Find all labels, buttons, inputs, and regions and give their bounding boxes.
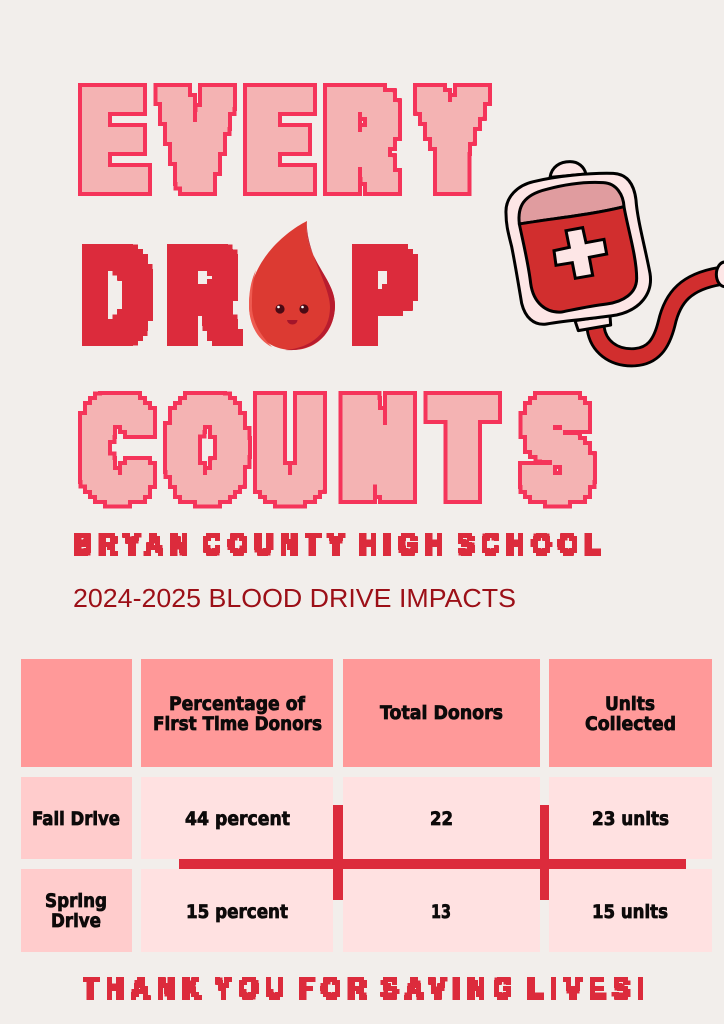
cell: spring units (549, 869, 712, 952)
row label: spring (21, 869, 132, 952)
row label: spring: Spring (45, 890, 107, 912)
icon: blood bag with tube (506, 162, 724, 357)
header cell: units: Units (605, 693, 655, 715)
cell: fall donors (343, 777, 540, 859)
title: COUNTS: COUNTS (85, 373, 587, 526)
table cross lines (179, 805, 686, 900)
cell: spring percent (141, 869, 333, 952)
cell: spring donors (343, 869, 540, 952)
footer: thank you: THANK YOU FOR SAVING LIVES! (83, 972, 645, 1004)
row label: fall (21, 777, 132, 859)
subtitle: impacts: 2024-2025 BLOOD DRIVE IMPACTS (73, 583, 516, 613)
cross (554, 228, 607, 278)
title: DROP: DR OP (83, 221, 414, 370)
cell: spring donors: 13 (431, 901, 451, 923)
header cell: total donors (343, 659, 540, 767)
header cell: percentage: First Time Donors (153, 713, 322, 735)
header cell: units (549, 659, 712, 767)
bag upper (519, 182, 624, 224)
bag body (506, 173, 651, 324)
cell: fall percent (141, 777, 333, 859)
subtitle: school: BRYAN COUNTY HIGH SCHOOL (74, 528, 600, 560)
header cell: total donors: Total Donors (380, 702, 503, 724)
tube connector (716, 262, 724, 287)
bag liquid (519, 207, 637, 312)
cell: fall units: 23 units (592, 808, 669, 830)
table (21, 659, 712, 952)
row label: fall: Fall Drive (32, 808, 120, 830)
neck (575, 316, 611, 331)
cell: spring percent: 15 percent (186, 901, 288, 923)
header cell: percentage: Percentage of (169, 693, 306, 715)
header cell: percentage (141, 659, 333, 767)
tube (596, 276, 720, 357)
cell: fall percent: 44 percent (185, 808, 290, 830)
icon: smiling blood drop (249, 221, 335, 350)
cell: spring units: 15 units (592, 901, 668, 923)
header cell: blank (21, 659, 132, 767)
cell: fall donors: 22 (430, 808, 453, 830)
row label: spring: Drive (51, 910, 101, 932)
top tab (550, 162, 586, 177)
title: EVERY: EVERY (82, 64, 481, 217)
header cell: units: Collected (585, 713, 676, 735)
cell: fall units (549, 777, 712, 859)
